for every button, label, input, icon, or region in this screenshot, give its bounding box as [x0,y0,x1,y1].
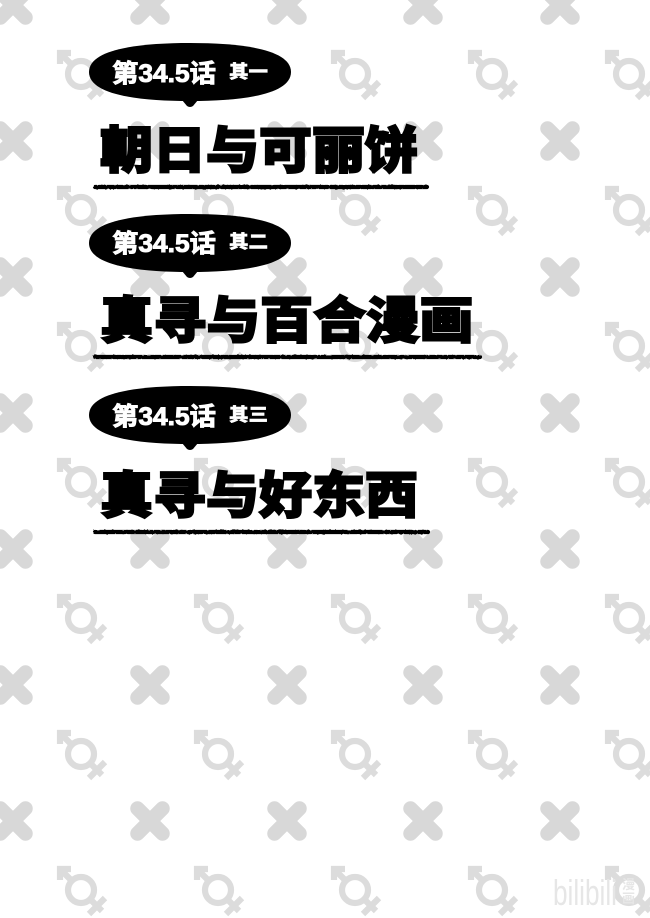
speech bubble: episode 34.5 part 1: 第34.5话 [112,60,216,88]
watermark: bilibili manhua: 漫 [622,877,635,892]
underline: part 2 [95,355,480,359]
title: part 3: 真寻与好东西 [100,456,418,528]
underline: part 1 [95,185,427,189]
speech bubble: episode 34.5 part 1 [89,43,291,107]
underline: part 3 [95,530,428,534]
speech bubble: episode 34.5 part 2 [89,214,291,278]
speech bubble: episode 34.5 part 2: 第34.5话 [112,230,216,258]
speech bubble: episode 34.5 part 3: 第34.5话 [112,403,216,431]
speech bubble: episode 34.5 part 3: 其三 [229,401,268,427]
watermark: bilibili manhua: 画 [622,891,635,906]
title: part 1: 朝日与可丽饼 [100,111,418,183]
speech bubble: episode 34.5 part 1: 其一 [229,58,268,84]
speech bubble: episode 34.5 part 3 [89,386,291,450]
title: part 2: 真寻与百合漫画 [100,281,473,353]
watermark: bilibili manhua: bilibili [553,872,617,913]
speech bubble: episode 34.5 part 2: 其二 [229,228,268,254]
